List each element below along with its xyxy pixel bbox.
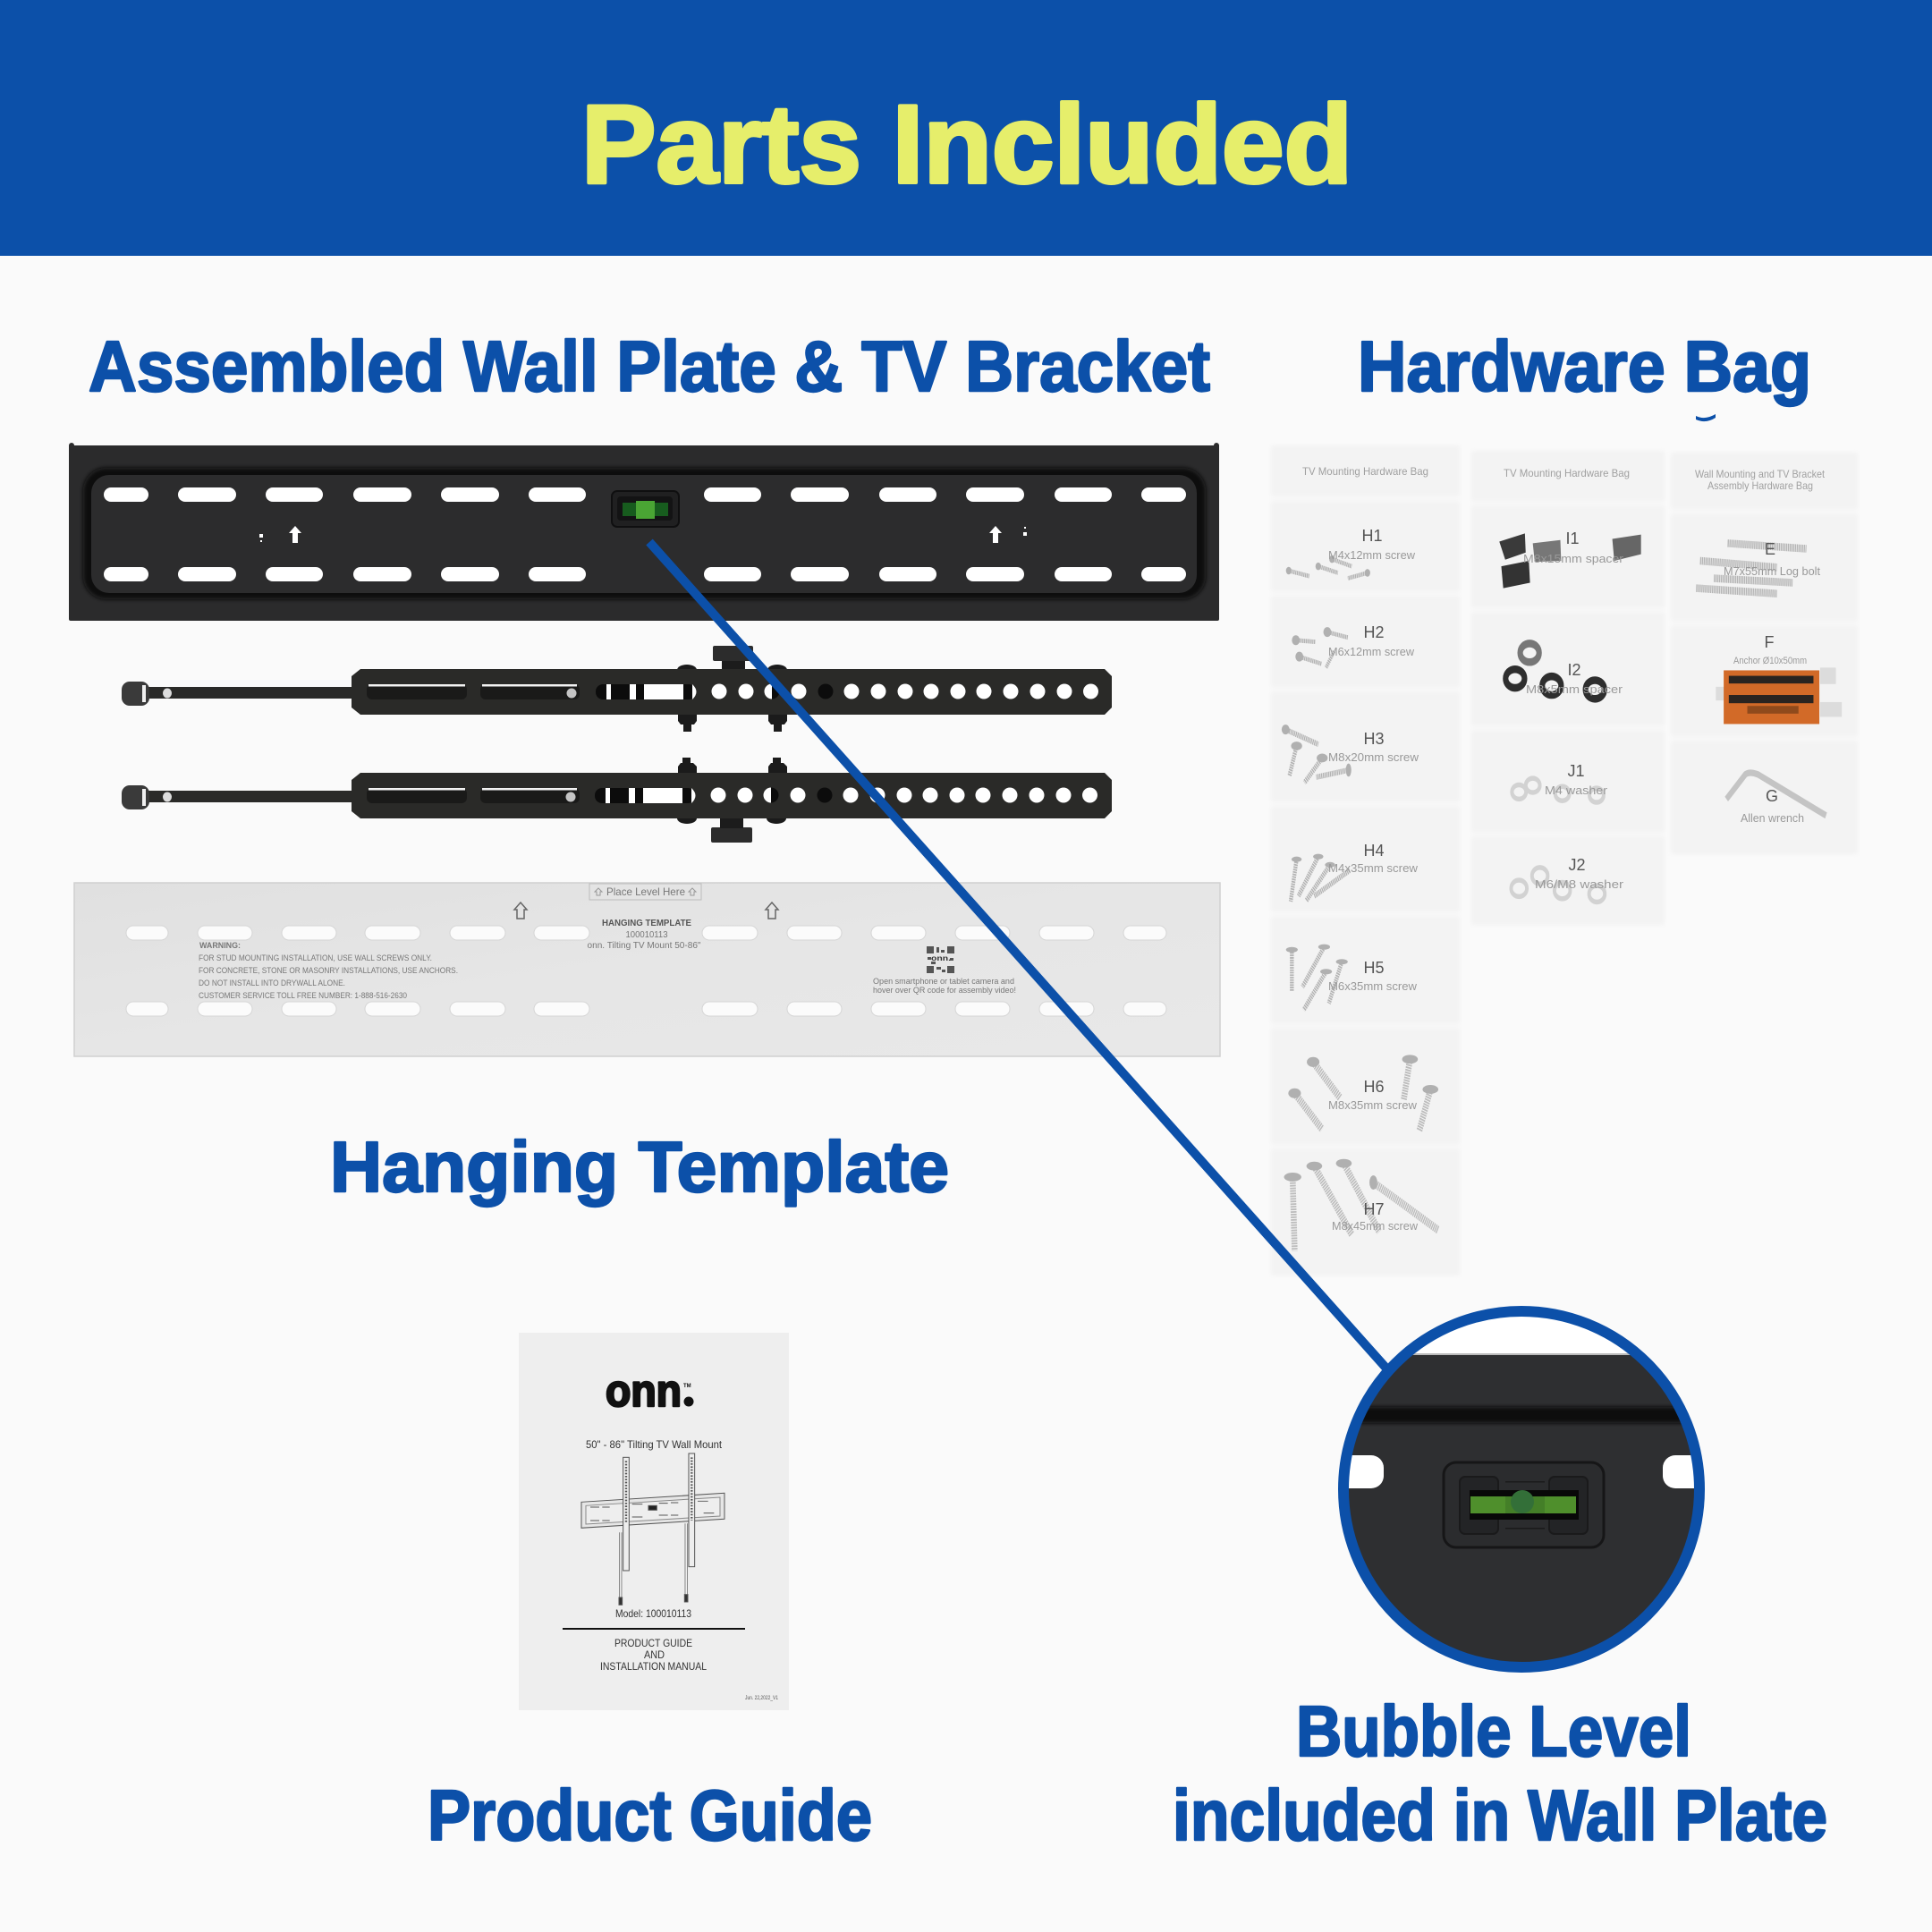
bag labels: column three: Anchor Ø10x50mm	[1733, 656, 1807, 666]
heading: hanging template: Hanging Template	[330, 1127, 949, 1207]
bag labels: column three: E	[1765, 540, 1775, 558]
spacers	[1499, 533, 1641, 589]
wall plate	[69, 443, 1219, 621]
warning text: FOR CONCRETE, STONE OR MASONRY INSTALLATIONS, USE ANCHORS.	[199, 966, 458, 975]
bag labels: column one: H2	[1363, 623, 1385, 641]
onn logo: onn	[606, 1366, 682, 1416]
bag labels: column three: Wall Mounting and TV Bracket	[1695, 468, 1826, 480]
booklet subtitle: 50" - 86" Tilting TV Wall Mount	[586, 1438, 723, 1451]
screw heads	[1282, 555, 1438, 1190]
QR code	[927, 946, 954, 973]
bag labels: column three: Assembly Hardware Bag	[1707, 479, 1813, 492]
bag labels: column one: H6	[1363, 1078, 1385, 1096]
template arrows	[514, 902, 778, 919]
bag labels: column one: TV Mounting Hardware Bag	[1302, 465, 1428, 478]
bubble level	[612, 491, 679, 527]
small screws	[1289, 559, 1368, 667]
guide title: AND	[644, 1648, 665, 1661]
upper bracket	[122, 646, 1112, 732]
header banner	[0, 0, 1932, 256]
bag labels: column one: H1	[1361, 527, 1383, 545]
warning text	[199, 941, 458, 1000]
dark washers	[1505, 643, 1605, 699]
bag labels: column three: M7x55mm Log bolt	[1724, 564, 1820, 578]
place level box	[589, 884, 701, 900]
large screws	[1292, 1059, 1438, 1251]
bag labels: column two: M8x15mm spacer	[1523, 552, 1624, 565]
bag labels: column three: Allen wrench	[1741, 811, 1804, 825]
hardware items	[1282, 533, 1842, 1251]
medium screws	[1285, 730, 1350, 1010]
bag labels: column one: H5	[1363, 959, 1385, 977]
guide title: PRODUCT GUIDE	[614, 1637, 692, 1649]
template title: onn. Tilting TV Mount 50-86"	[587, 941, 701, 951]
model number: Model: 100010113	[615, 1607, 691, 1620]
template title: HANGING TEMPLATE	[602, 919, 691, 928]
template title: 100010113	[626, 930, 668, 940]
place level box: Place Level Here	[606, 886, 685, 898]
title: Parts Included	[581, 83, 1352, 207]
bag labels: column one: M4x35mm screw	[1328, 861, 1419, 875]
hardware bags	[1271, 445, 1858, 1275]
onn logo: TM	[683, 1384, 691, 1389]
bag labels: column one: M8x20mm screw	[1328, 750, 1419, 764]
bag labels: column two: I2	[1567, 661, 1581, 679]
callout line	[649, 542, 1388, 1370]
light washers	[1511, 778, 1605, 902]
lower bracket	[122, 758, 1112, 843]
bag labels: column one: M8x45mm screw	[1332, 1219, 1419, 1233]
QR caption: Open smartphone or tablet camera and	[873, 977, 1014, 986]
template title	[587, 919, 701, 951]
bag labels: column one: M4x12mm screw	[1328, 548, 1416, 562]
bag labels: column one: M6x35mm screw	[1328, 979, 1418, 993]
bag labels: column two	[1504, 467, 1630, 891]
divider rule	[563, 1628, 745, 1630]
bag labels: column one: H7	[1363, 1200, 1385, 1218]
QR caption: hover over QR code for assembly video!	[873, 986, 1016, 995]
hanging template sheet	[74, 883, 1220, 1056]
QR caption	[873, 977, 1016, 995]
guide title	[600, 1637, 707, 1673]
mount line drawing	[581, 1453, 724, 1605]
heading: bubble level	[1173, 1691, 1827, 1855]
heading: bubble level: Bubble Level	[1296, 1691, 1691, 1771]
bag labels: column two: J2	[1568, 856, 1586, 874]
template slots	[126, 926, 1166, 1016]
bag labels: column one: M8x35mm screw	[1328, 1098, 1418, 1112]
bag labels: column two: J1	[1567, 762, 1585, 780]
allen wrench	[1726, 773, 1826, 816]
anchors	[1716, 667, 1842, 717]
bag labels: column three: F	[1764, 633, 1775, 651]
heading: product guide: Product Guide	[428, 1775, 872, 1855]
QR code: onn.	[931, 954, 951, 962]
adjustable TV brackets	[122, 646, 1112, 843]
bag labels: column one: H4	[1363, 842, 1385, 860]
bag labels: column two: M6/M8 washer	[1535, 877, 1624, 891]
warning text: WARNING:	[199, 941, 241, 950]
product guide booklet	[519, 1333, 789, 1710]
orange anchor label	[1724, 670, 1819, 724]
bag labels: column two: TV Mounting Hardware Bag	[1504, 467, 1630, 479]
mounting slots	[104, 487, 1186, 581]
bubble level magnified callout	[1315, 1311, 1726, 1667]
heading: bubble level: included in Wall Plate	[1173, 1775, 1827, 1855]
guide title: INSTALLATION MANUAL	[600, 1660, 707, 1673]
revision date: Jun. 22,2022_V1	[745, 1696, 779, 1701]
bag labels: column two: M4 washer	[1545, 784, 1608, 797]
lag bolts	[1696, 543, 1807, 594]
bag labels: column two: I1	[1565, 530, 1580, 547]
bag labels: column three: G	[1766, 787, 1778, 805]
bag labels: column three	[1695, 468, 1826, 825]
warning text: FOR STUD MOUNTING INSTALLATION, USE WALL SCREWS ONLY.	[199, 953, 432, 962]
warning text: CUSTOMER SERVICE TOLL FREE NUMBER: 1-888-516-2630	[199, 991, 407, 1000]
heading: hardware bag: Hardware Bag	[1358, 326, 1811, 406]
bag labels: column one	[1302, 465, 1428, 1233]
bag labels: column one: M6x12mm screw	[1328, 645, 1415, 658]
warning text: DO NOT INSTALL INTO DRYWALL ALONE.	[199, 979, 345, 987]
bag labels: column one: H3	[1363, 730, 1385, 748]
bag labels: column two: M8x5mm spacer	[1526, 682, 1623, 696]
heading: assembled wall plate and TV bracket: Assembled Wall Plate & TV Bracket	[89, 326, 1210, 406]
bag backgrounds	[1271, 445, 1858, 1275]
